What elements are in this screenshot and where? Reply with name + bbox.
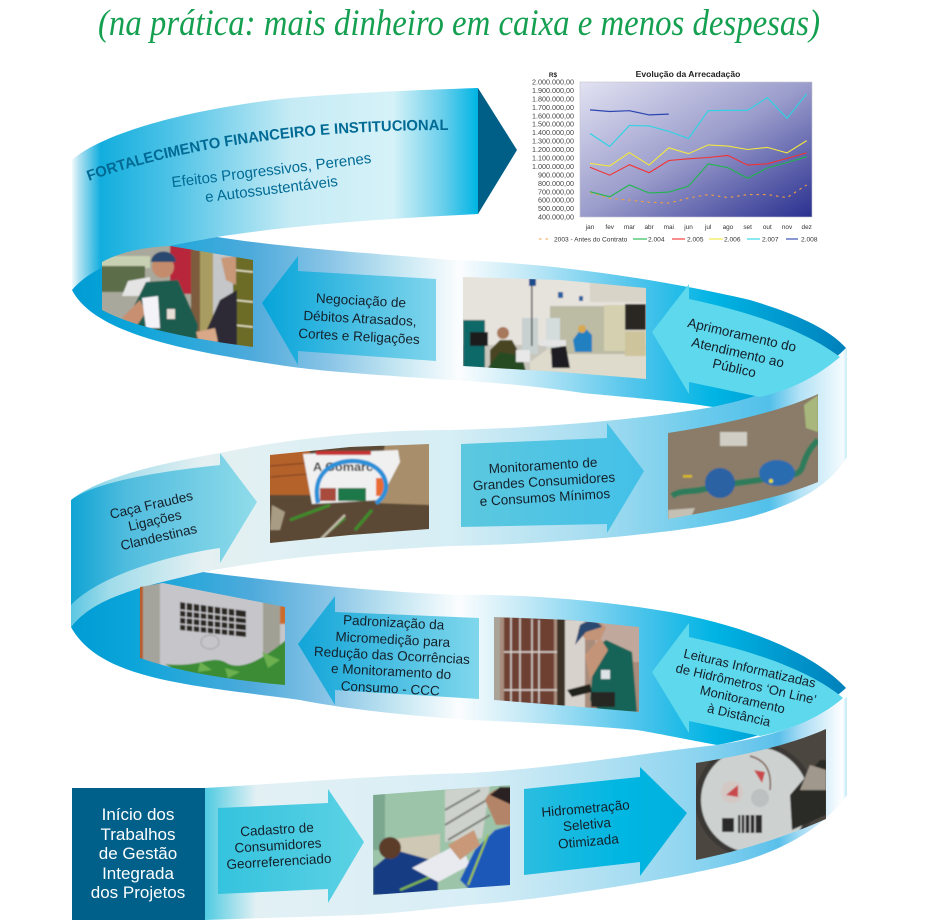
label: Monitoramento de bbox=[488, 455, 598, 476]
label: Seletiva bbox=[562, 815, 612, 834]
heading: strengthening: FORTALECIMENTO FINANCEIRO E INSTITUCIONAL bbox=[86, 120, 448, 181]
arrow: micro-metering standardisation bbox=[298, 596, 479, 705]
y axis labels: 1.800.000,00 bbox=[532, 94, 574, 103]
y axis labels: 900.000,00 bbox=[538, 170, 574, 179]
legend: 2.007 bbox=[762, 236, 779, 244]
legend: 2.004 bbox=[648, 236, 665, 244]
label: Otimizada bbox=[558, 831, 620, 852]
photo: standardised meter box bbox=[140, 583, 285, 685]
photo: public service office bbox=[463, 277, 646, 379]
ribbon segment: second level back band bbox=[72, 237, 846, 407]
label bbox=[541, 797, 633, 853]
arrow: remote online readings bbox=[652, 623, 843, 738]
y axis labels: 1.900.000,00 bbox=[532, 86, 574, 95]
legend: 2.005 bbox=[687, 236, 704, 244]
y axis labels bbox=[532, 78, 574, 222]
label: Grandes Consumidores bbox=[472, 470, 616, 493]
y axis labels: 600.000,00 bbox=[538, 196, 574, 205]
y axis labels: 1.300.000,00 bbox=[532, 137, 574, 146]
x axis months: abr bbox=[644, 224, 655, 231]
subheading line one: Efeitos Progressivos, Perenes bbox=[171, 150, 372, 191]
start text: dos Projetos bbox=[91, 883, 185, 902]
subheading line two: e Autossustentáveis bbox=[204, 173, 339, 206]
label: Atendimento ao bbox=[690, 335, 786, 370]
start text: Trabalhos bbox=[101, 825, 175, 844]
label: Cadastro de bbox=[240, 820, 314, 839]
start text: de Gestão bbox=[99, 844, 177, 863]
y axis labels: 800.000,00 bbox=[538, 179, 574, 188]
y axis labels: 1.500.000,00 bbox=[532, 120, 574, 129]
photo: clandestine connection and newspaper bbox=[270, 444, 429, 543]
ribbon segment: bottom front band bbox=[205, 697, 847, 920]
ribbon segment: fourth level back band bbox=[71, 572, 846, 745]
label: Público bbox=[711, 356, 758, 380]
label: Georreferenciado bbox=[226, 851, 332, 872]
label: Aprimoramento do bbox=[686, 315, 798, 355]
label bbox=[298, 290, 422, 347]
photo: water meters on pipe bbox=[665, 390, 820, 522]
x axis months: set bbox=[743, 224, 752, 231]
photo: technician reading meter bbox=[494, 617, 639, 712]
y axis labels: 700.000,00 bbox=[538, 187, 574, 196]
label bbox=[108, 488, 202, 554]
arrow: selective metering bbox=[524, 767, 687, 876]
label: Caça Fraudes bbox=[108, 488, 195, 522]
x axis months: mar bbox=[624, 224, 636, 231]
y axis labels: 1.700.000,00 bbox=[532, 103, 574, 112]
label: e Consumos Mínimos bbox=[479, 486, 611, 509]
start text: Integrada bbox=[102, 864, 174, 883]
legend: 2.008 bbox=[801, 236, 818, 244]
arrow: debt negotiation bbox=[262, 256, 436, 365]
label: Hidrometração bbox=[541, 797, 630, 820]
label bbox=[224, 819, 332, 872]
label: de Hidrômetros ‘On Line’ bbox=[674, 660, 818, 707]
label: Leituras Informatizadas bbox=[682, 646, 818, 691]
label: Monitoramento bbox=[699, 682, 786, 716]
x axis months: jun bbox=[683, 224, 693, 231]
label: Negociação de bbox=[316, 291, 406, 310]
photo: georeferenced registration field work bbox=[370, 785, 515, 897]
label: Micromedição para bbox=[335, 629, 451, 650]
y axis labels: 400.000,00 bbox=[538, 213, 574, 222]
currency label: R$ bbox=[549, 72, 558, 79]
label bbox=[312, 611, 472, 700]
label bbox=[471, 454, 617, 509]
photo: clandestine connection and newspaper: A Gomarc bbox=[313, 460, 373, 474]
label bbox=[667, 645, 822, 738]
x axis months: out bbox=[763, 224, 772, 231]
start text: Início dos bbox=[102, 805, 174, 824]
y axis labels: 1.200.000,00 bbox=[532, 145, 574, 154]
arrow: improved public service bbox=[652, 284, 840, 397]
x axis months: ago bbox=[723, 224, 734, 231]
data series bbox=[590, 94, 807, 203]
label: Cortes e Religações bbox=[298, 326, 420, 347]
arrow: large consumers monitoring bbox=[461, 423, 644, 533]
y axis labels: 2.000.000,00 bbox=[532, 78, 574, 86]
x axis months: jul bbox=[704, 224, 711, 231]
start box: beginning of the work bbox=[72, 788, 205, 920]
panel: top ribbon band bbox=[72, 88, 517, 290]
label: à Distância bbox=[706, 700, 773, 730]
line chart: revenue evolution bbox=[532, 69, 818, 244]
photo: meter reader with customer bbox=[100, 244, 255, 352]
label: Ligações bbox=[127, 507, 183, 534]
label: e Monitoramento do bbox=[331, 661, 451, 682]
title: (na prática: mais dinheiro em caixa e menos despesas) bbox=[98, 3, 820, 44]
label: Consumo - CCC bbox=[340, 678, 440, 699]
x axis months: jan bbox=[585, 224, 595, 231]
legend bbox=[539, 236, 818, 244]
y axis labels: 1.000.000,00 bbox=[532, 162, 574, 171]
chart title: Evolução da Arrecadação bbox=[636, 69, 740, 79]
label: Consumidores bbox=[234, 835, 322, 856]
label: Clandestinas bbox=[119, 521, 199, 553]
label: Padronização da bbox=[343, 612, 445, 633]
start text bbox=[91, 805, 185, 902]
ribbon segment: third level front band bbox=[71, 348, 847, 627]
arrow: georeferenced registration bbox=[218, 789, 364, 903]
y axis labels: 1.400.000,00 bbox=[532, 128, 574, 137]
x axis months: fev bbox=[605, 224, 615, 231]
label: Débitos Atrasados, bbox=[303, 308, 417, 329]
photo: water meter dial bbox=[696, 729, 826, 860]
x axis months: dez bbox=[802, 224, 812, 231]
x axis months: nov bbox=[782, 224, 793, 231]
band body bbox=[72, 88, 478, 290]
x axis months: mai bbox=[664, 224, 674, 231]
plot background bbox=[580, 82, 812, 217]
legend: 2.006 bbox=[724, 236, 741, 244]
y axis labels: 1.600.000,00 bbox=[532, 111, 574, 120]
y axis labels: 1.100.000,00 bbox=[532, 154, 574, 162]
x axis months bbox=[585, 224, 812, 231]
label: Redução das Ocorrências bbox=[314, 644, 471, 667]
label bbox=[678, 315, 798, 388]
arrow head: dark tip pointing to chart bbox=[478, 88, 517, 214]
legend: 2003 - Antes do Contrato bbox=[554, 236, 628, 244]
arrow: fraud hunting bbox=[71, 453, 257, 605]
y axis labels: 500.000,00 bbox=[538, 204, 574, 213]
